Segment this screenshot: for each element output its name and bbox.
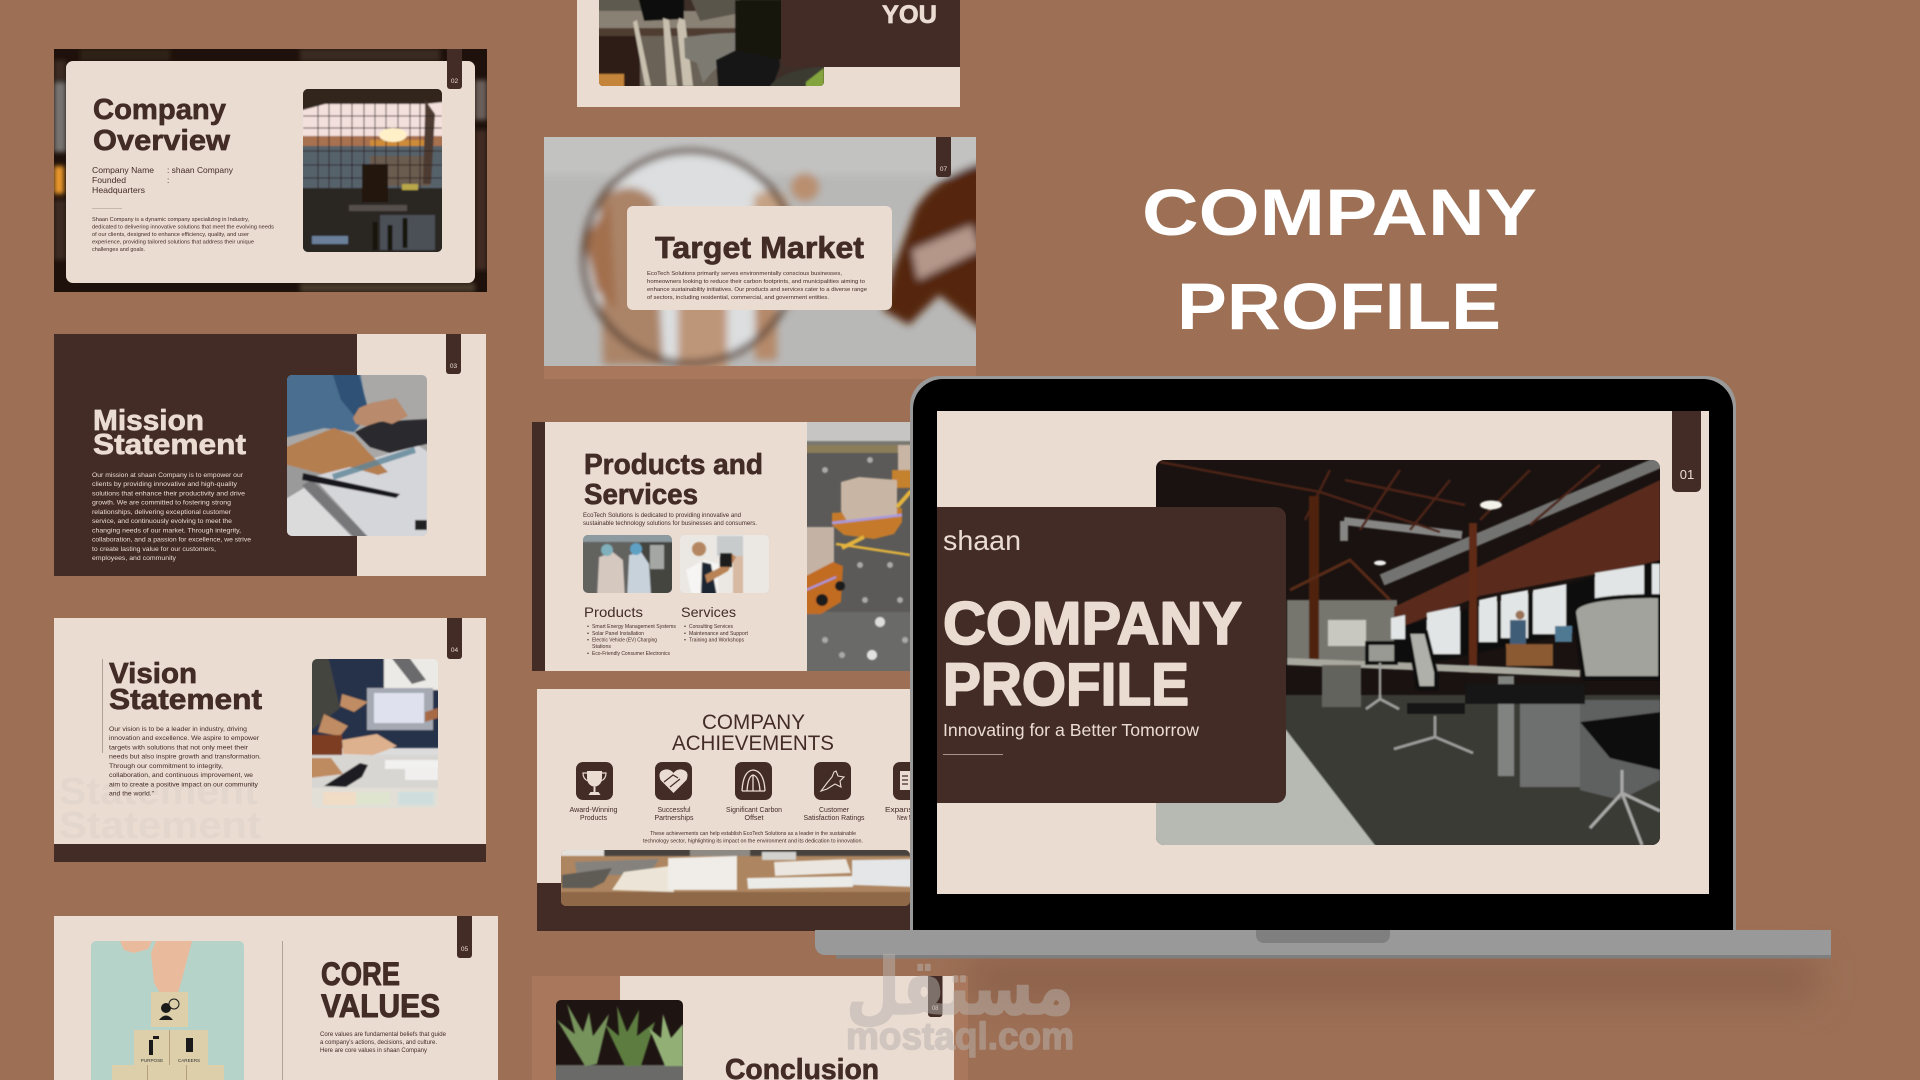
icon: star in hand <box>814 762 851 800</box>
icon: trophy <box>576 762 613 800</box>
slide: thank you <box>577 0 960 107</box>
mission paragraph: growth. We are committed to fostering strong <box>92 500 231 507</box>
achievements paragraph: These achievements can help establish EcoTech Solutions as a leader in the sustainable <box>650 831 856 837</box>
icon: handshake heart <box>655 762 692 800</box>
vision paragraph: needs but also inspire growth and transformation. <box>109 754 261 761</box>
laptop mockup <box>815 376 1831 958</box>
target market paragraph <box>647 271 867 301</box>
photo: wooden blocks stacked by hand <box>91 941 244 1080</box>
products list <box>584 604 676 657</box>
slide: conclusion <box>532 976 968 1080</box>
mission paragraph: service, and continuously evolving to meet the <box>92 518 232 525</box>
target market paragraph: enhance sustainability initiatives. Our products and services cater to a diverse range <box>647 287 867 293</box>
products list: Stations <box>592 644 611 650</box>
main title: company profile: COMPANY <box>1142 175 1537 249</box>
main title: company profile: PROFILE <box>1177 269 1501 343</box>
services list <box>681 604 748 644</box>
services list: Services <box>681 604 736 620</box>
overview paragraph: dedicated to delivering innovative solutions that meet the evolving needs <box>92 224 274 230</box>
products list: Products <box>584 604 643 620</box>
target market paragraph: EcoTech Solutions primarily serves environmentally conscious businesses, <box>647 271 842 277</box>
heading: mission statement <box>93 405 246 461</box>
cover heading: PROFILE <box>943 651 1189 718</box>
heading: company overview <box>93 94 230 157</box>
mission paragraph: clients by providing innovative and high-quality <box>92 481 238 488</box>
achievement labels: Award-Winning <box>570 807 618 814</box>
heading: core values: VALUES <box>321 988 440 1024</box>
services list: Consulting Services <box>689 624 733 630</box>
company facts: : <box>167 176 169 185</box>
page tab 02 <box>447 49 462 89</box>
achievements paragraph: technology sector, highlighting its impact on the environment and its dedication to innovation. <box>643 838 863 844</box>
products list: • <box>587 631 589 637</box>
heading: company overview: Overview <box>93 125 230 157</box>
products list: Eco-Friendly Consumer Electronics <box>592 651 670 657</box>
company facts: Headquarters <box>92 186 145 195</box>
mission paragraph: collaboration, and a passion for excellence, we strive <box>92 537 251 544</box>
dark panel <box>781 0 960 67</box>
page tab 02: 02 <box>451 78 458 85</box>
laptop screen: cover slide <box>937 411 1709 894</box>
vision paragraph: Through our commitment to integrity, <box>109 763 223 770</box>
photo: technician <box>680 535 769 596</box>
vision paragraph: targets with solutions that not only meet their <box>109 744 249 752</box>
overview paragraph: challenges and goals. <box>92 247 145 253</box>
icon: carbon dome <box>735 762 772 800</box>
intro paragraph: EcoTech Solutions is dedicated to providing innovative and <box>583 513 741 519</box>
slide: products and services <box>532 419 914 674</box>
services list: • <box>684 638 686 644</box>
achievement labels: Successful <box>658 807 691 814</box>
page tab 01: 01 <box>1680 467 1694 482</box>
laptop base <box>815 930 1831 958</box>
vision paragraph <box>109 726 261 798</box>
slide: core values <box>54 916 498 1080</box>
ghost watermark heading: Statement <box>59 805 261 847</box>
achievement labels: Satisfaction Ratings <box>804 815 865 822</box>
achievement labels: Offset <box>744 815 764 822</box>
laptop lid <box>910 376 1736 930</box>
page tab 07 <box>936 137 951 177</box>
core values paragraph: Here are core values in shaan Company <box>320 1047 428 1054</box>
cover heading: COMPANY <box>943 590 1242 657</box>
mission paragraph <box>92 472 251 562</box>
vision paragraph: collaboration, and continuous improvement, we <box>109 772 253 779</box>
mission paragraph: solutions that enhance their productivity and drive <box>92 490 245 498</box>
vision paragraph: aim to create a positive impact on our community <box>109 781 259 788</box>
overview paragraph: experience, providing tailored solutions that address their unique <box>92 240 254 246</box>
achievement labels: Customer <box>819 807 850 814</box>
achievement labels <box>570 807 939 822</box>
photo: open-plan office <box>1150 460 1666 850</box>
photo: desk with open book <box>558 848 914 908</box>
page tab 08 <box>928 976 942 1017</box>
achievement labels: Partnerships <box>654 815 694 822</box>
slide: target market <box>544 137 976 379</box>
photo: magnifying glass over wooden figures <box>544 137 976 366</box>
cover heading <box>943 590 1242 718</box>
heading: target market: Target Market <box>655 230 864 265</box>
photo: wooden blocks stacked by hand: PURPOSE <box>141 1058 163 1063</box>
mission paragraph: employees, and community <box>92 555 177 562</box>
heading: company achievements <box>672 714 833 750</box>
page tab 05: 05 <box>461 946 468 953</box>
target market paragraph: homeowners looking to reduce their carbon footprints, and municipalities aiming to <box>647 279 865 285</box>
heading: core values <box>321 956 440 1024</box>
page tab 04 <box>447 618 462 659</box>
mission paragraph: Our mission at shaan Company is to empower our <box>92 472 244 479</box>
content card <box>66 61 475 283</box>
watermark: mostaql <box>846 943 1074 1058</box>
page tab 04: 04 <box>451 647 458 654</box>
icon: market expansion <box>893 762 910 800</box>
mission paragraph: relationships, delivering exceptional customer <box>92 509 232 516</box>
heading: company achievements: ACHIEVEMENTS <box>672 732 834 755</box>
company facts: : shaan Company <box>167 166 234 175</box>
achievement labels: New Markets <box>897 815 927 822</box>
heading: thank you (cropped): YOU <box>882 1 937 29</box>
page tab 07: 07 <box>940 166 947 173</box>
achievement labels: Products <box>580 815 607 822</box>
products list: Electric Vehicle (EV) Charging <box>592 638 657 644</box>
achievements paragraph <box>643 831 863 844</box>
heading: company achievements: COMPANY <box>702 711 805 734</box>
services list: • <box>684 631 686 637</box>
photo: restaurant seating <box>596 0 824 88</box>
photo: green plants <box>553 1000 686 1080</box>
achievement labels: Significant Carbon <box>726 807 782 814</box>
overview paragraph: Shaan Company is a dynamic company specializing in Industry, <box>92 217 249 223</box>
slide: vision statement <box>54 618 486 862</box>
brand name: shaan <box>943 525 1021 556</box>
heading: vision statement: Statement <box>109 684 262 716</box>
slide background photo <box>54 49 487 292</box>
page tab 03 <box>446 334 461 374</box>
photo: warehouse robots <box>804 419 914 674</box>
heading: products and services: Services <box>584 479 698 511</box>
page tab 03: 03 <box>450 363 457 370</box>
laptop shadow <box>968 958 1818 1000</box>
achievement labels: Expansion into <box>885 807 939 814</box>
mission paragraph: to create lasting value for our customers, <box>92 546 216 553</box>
watermark: mostaql: mostaql.com <box>846 1016 1074 1058</box>
services list: • <box>684 624 686 630</box>
page tab 05 <box>457 916 472 958</box>
heading: products and services <box>584 449 763 511</box>
company facts: Company Name <box>92 166 154 175</box>
company facts <box>92 166 234 195</box>
heading: mission statement: Statement <box>93 429 246 461</box>
watermark: mostaql: مستقل <box>846 943 1074 1033</box>
ghost watermark heading: Statement <box>59 771 258 813</box>
heading: vision statement: Vision <box>109 658 197 690</box>
slide: mission statement <box>54 334 486 576</box>
services list: Training and Workshops <box>689 638 744 644</box>
core values paragraph <box>320 1031 446 1054</box>
overview paragraph: of our clients, designed to enhance efficiency, quality, and user <box>92 232 249 238</box>
intro paragraph <box>583 513 757 527</box>
vision paragraph: innovation and excellence. We aspire to empower <box>109 735 260 742</box>
vision paragraph: Our vision is to be a leader in industry, driving <box>109 726 247 733</box>
main title: company profile <box>1142 175 1537 343</box>
intro paragraph: sustainable technology solutions for businesses and consumers. <box>583 521 757 527</box>
company facts: Founded <box>92 176 126 185</box>
heading: mission statement: Mission <box>93 405 204 437</box>
core values paragraph: a company's actions, decisions, and culture. <box>320 1039 437 1046</box>
photo: wooden blocks stacked by hand: CAREERS <box>178 1058 200 1063</box>
heading: products and services: Products and <box>584 449 763 481</box>
products list: • <box>587 624 589 630</box>
photo: hand on financial chart <box>284 372 430 542</box>
content card <box>627 206 892 310</box>
mission paragraph: changing needs of our market. Through integrity, <box>92 527 241 534</box>
slide: company overview <box>54 49 487 292</box>
page tab 08: 08 <box>932 1006 939 1012</box>
photo: team reviewing charts <box>309 656 441 810</box>
products list: • <box>587 651 589 657</box>
products list: Smart Energy Management Systems <box>592 624 676 630</box>
slide: company achievements <box>537 689 939 931</box>
heading: company overview: Company <box>93 94 226 126</box>
photo: lab workers <box>583 535 672 593</box>
products list: Solar Panel Installation <box>592 631 644 637</box>
photo: airport terminal at sunset <box>300 86 445 254</box>
heading: vision statement <box>109 658 262 716</box>
heading: core values: CORE <box>321 956 400 992</box>
vision paragraph: and the world." <box>109 790 155 798</box>
target market paragraph: of sectors, including residential, commercial, and government entities. <box>647 295 829 301</box>
services list: Maintenance and Support <box>689 631 748 637</box>
page tab 01 <box>1672 411 1701 492</box>
core values paragraph: Core values are fundamental beliefs that guide <box>320 1031 446 1038</box>
ghost watermark heading <box>59 771 261 847</box>
overview paragraph <box>92 217 274 253</box>
title panel <box>937 507 1286 803</box>
products list: • <box>587 638 589 644</box>
tagline: Innovating for a Better Tomorrow <box>943 720 1199 740</box>
